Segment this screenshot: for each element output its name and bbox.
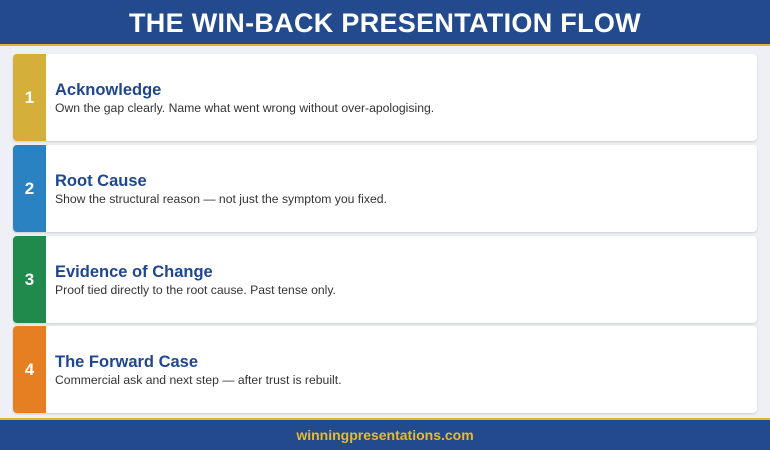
- card 2: [13, 145, 757, 232]
- text 2: Root Cause: [55, 172, 147, 190]
- number 1: [13, 54, 46, 141]
- number 3: [13, 236, 46, 323]
- text 2: Show the structural reason — not just the symptom you fixed.: [55, 192, 387, 206]
- text 1: [55, 81, 434, 115]
- footer: winningpresentations.com: [296, 427, 474, 443]
- number 4: 4: [25, 360, 34, 378]
- text 4: Commercial ask and next step — after trust is rebuilt.: [55, 373, 342, 387]
- text 4: [55, 353, 342, 387]
- title: THE WIN-BACK PRESENTATION FLOW: [129, 8, 641, 38]
- text 1: Own the gap clearly. Name what went wrong without over-apologising.: [55, 101, 434, 115]
- title: [0, 0, 770, 46]
- card 1: [13, 54, 757, 141]
- text 1: Acknowledge: [55, 81, 161, 99]
- card 3: [13, 236, 757, 323]
- text 3: [55, 263, 336, 297]
- text 2: [55, 172, 387, 206]
- text 3: Evidence of Change: [55, 263, 213, 281]
- number 2: 2: [25, 178, 34, 198]
- number 4: [13, 326, 46, 413]
- text 4: The Forward Case: [55, 353, 198, 371]
- text 3: Proof tied directly to the root cause. Past tense only.: [55, 283, 336, 297]
- number 3: 3: [25, 270, 34, 288]
- footer: [0, 418, 770, 450]
- card 4: [13, 326, 757, 413]
- number 2: [13, 145, 46, 232]
- number 1: 1: [25, 88, 34, 106]
